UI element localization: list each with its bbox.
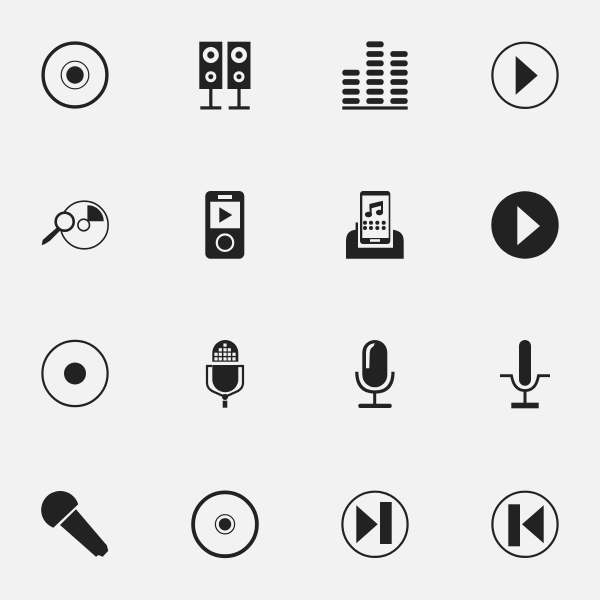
icon: filled play button — [491, 191, 559, 259]
icon: pair of speakers — [199, 42, 250, 110]
icon: vintage studio microphone — [207, 340, 243, 408]
icon: skip next button — [342, 492, 408, 557]
icon: outlined play button — [492, 43, 558, 108]
icon: slim stand microphone — [500, 340, 550, 408]
icon: handheld microphone — [41, 491, 108, 557]
icon: record button — [42, 341, 108, 406]
icon: desk microphone with highlight — [357, 340, 393, 408]
icon: disc — [193, 492, 257, 556]
icon: phone in music dock — [346, 191, 404, 259]
icon: equalizer bars — [342, 41, 408, 110]
icon: skip previous button — [492, 492, 558, 557]
icon: disc with magnifier — [42, 201, 108, 249]
icon: compact disc with ring — [43, 43, 107, 107]
icon: portable media player — [205, 191, 244, 259]
